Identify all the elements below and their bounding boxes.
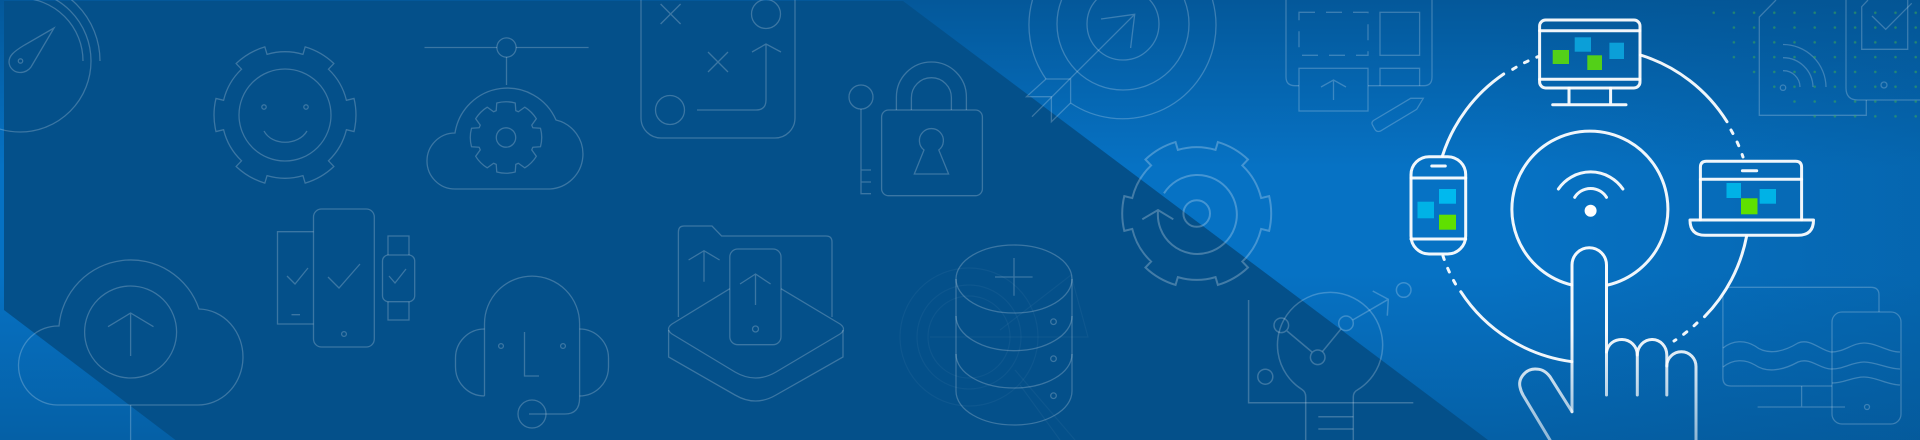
- icon: folder upload on platform: [668, 226, 844, 401]
- icon: cloud with gear: [424, 38, 589, 189]
- icon: support headset: [455, 276, 608, 428]
- icon: smiling gear: [214, 47, 356, 183]
- icon: refresh gear: [1122, 142, 1271, 285]
- icon: idea bulb chart: [1249, 283, 1413, 440]
- icon: database: [956, 245, 1072, 425]
- green dot grid: [1704, 5, 1920, 123]
- icon: target with arrow: [1026, 0, 1216, 122]
- icon: phones and watch with checkmarks: [278, 209, 415, 347]
- device ring: [1442, 55, 1746, 362]
- icon: laptop: [1690, 161, 1814, 235]
- icon: desktop monitor: [1540, 20, 1640, 105]
- icon: padlock and key: [849, 62, 982, 196]
- icon: gauge: [0, 0, 100, 132]
- icon: strategy board: [641, 0, 795, 138]
- icon: document with wifi and device: [1759, 0, 1920, 115]
- icon: pointing hand: [1520, 248, 1696, 440]
- icon: smartphone: [1411, 157, 1466, 254]
- icon: central touch circle with wifi: [1512, 131, 1668, 285]
- icon: design panel and pen: [1286, 0, 1432, 132]
- dark diagonal band: [4, 1, 1488, 440]
- icon: cloud upload: [19, 260, 243, 440]
- icon: faint target behind database: [900, 268, 1088, 440]
- icon: monitor and phone with waves: [1723, 287, 1901, 424]
